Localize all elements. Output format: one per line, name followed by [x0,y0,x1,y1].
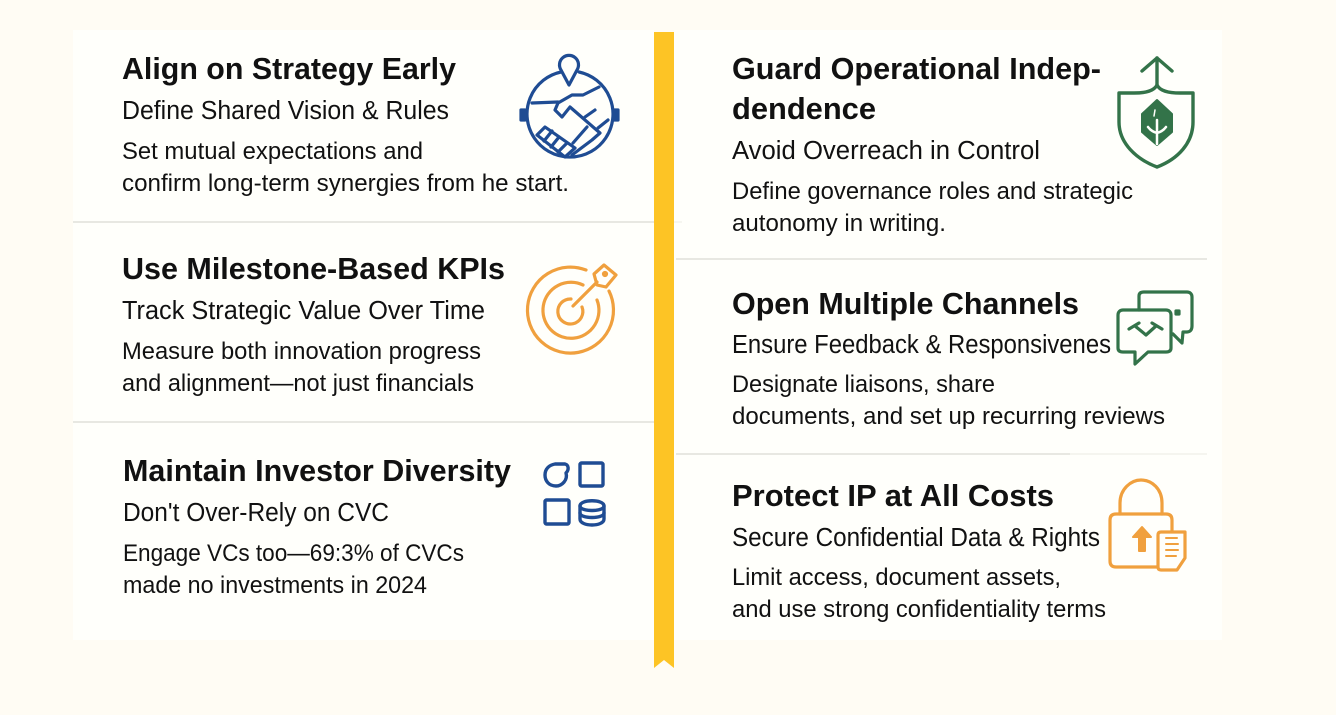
item: Use Milestone-Based KPIs [122,251,505,397]
item: Protect IP at All Costs [732,478,1106,623]
item: Align on Strategy Early: Set mutual expectations and [122,138,423,165]
item: Open Multiple Channels: documents, and set up recurring reviews [732,403,1165,430]
panel: left column [73,30,654,640]
item: Open Multiple Channels [732,286,1165,430]
item: Guard Operational Independence: dendence [732,91,876,126]
item: Maintain Investor Diversity: Maintain Investor Diversity [123,453,512,488]
item: Protect IP at All Costs: and use strong confidentiality terms [732,596,1106,623]
item: Protect IP at All Costs: Secure Confidential Data & Rights [732,524,1100,552]
icon: padlock with document [1110,480,1185,570]
item: Open Multiple Channels: Ensure Feedback & Responsivenes [732,331,1111,359]
item: Maintain Investor Diversity: Don't Over-Rely on CVC [123,499,389,527]
item: Guard Operational Independence: autonomy in writing. [732,210,946,237]
item: Open Multiple Channels: Designate liaisons, share [732,371,995,398]
icon: speech bubbles [1118,292,1192,364]
item: Maintain Investor Diversity [123,453,512,599]
icon: shield with arrow and plant [1119,58,1193,167]
ribbon: central yellow divider [654,32,674,668]
item: Use Milestone-Based KPIs: Track Strategic Value Over Time [122,297,485,325]
item: Guard Operational Independence: Guard Operational Indep- [732,51,1101,86]
decorative tick beside ribbon [674,221,682,223]
item: Align on Strategy Early [122,51,569,197]
item: Use Milestone-Based KPIs: Use Milestone-Based KPIs [122,251,505,286]
item: Use Milestone-Based KPIs: Measure both innovation progress [122,338,481,365]
item: Use Milestone-Based KPIs: and alignment—not just financials [122,370,474,397]
item: Open Multiple Channels: Open Multiple Channels [732,286,1079,321]
item: Protect IP at All Costs: Protect IP at All Costs [732,478,1054,513]
item: Align on Strategy Early: Align on Strategy Early [122,51,457,86]
panel: right column [674,30,1222,640]
item: Guard Operational Independence [732,51,1133,237]
icon: handshake in circle [521,55,618,157]
icon: four squares grid [545,463,604,525]
item: Guard Operational Independence: Avoid Overreach in Control [732,137,1040,165]
item: Align on Strategy Early: confirm long-term synergies from he start. [122,170,569,197]
item: Maintain Investor Diversity: made no investments in 2024 [123,572,427,599]
item: Protect IP at All Costs: Limit access, document assets, [732,564,1061,591]
item: Align on Strategy Early: Define Shared Vision & Rules [122,97,449,125]
icon: target with arrow [527,265,616,353]
item: Guard Operational Independence: Define governance roles and strategic [732,178,1133,205]
item: Maintain Investor Diversity: Engage VCs too—69:3% of CVCs [123,540,464,567]
